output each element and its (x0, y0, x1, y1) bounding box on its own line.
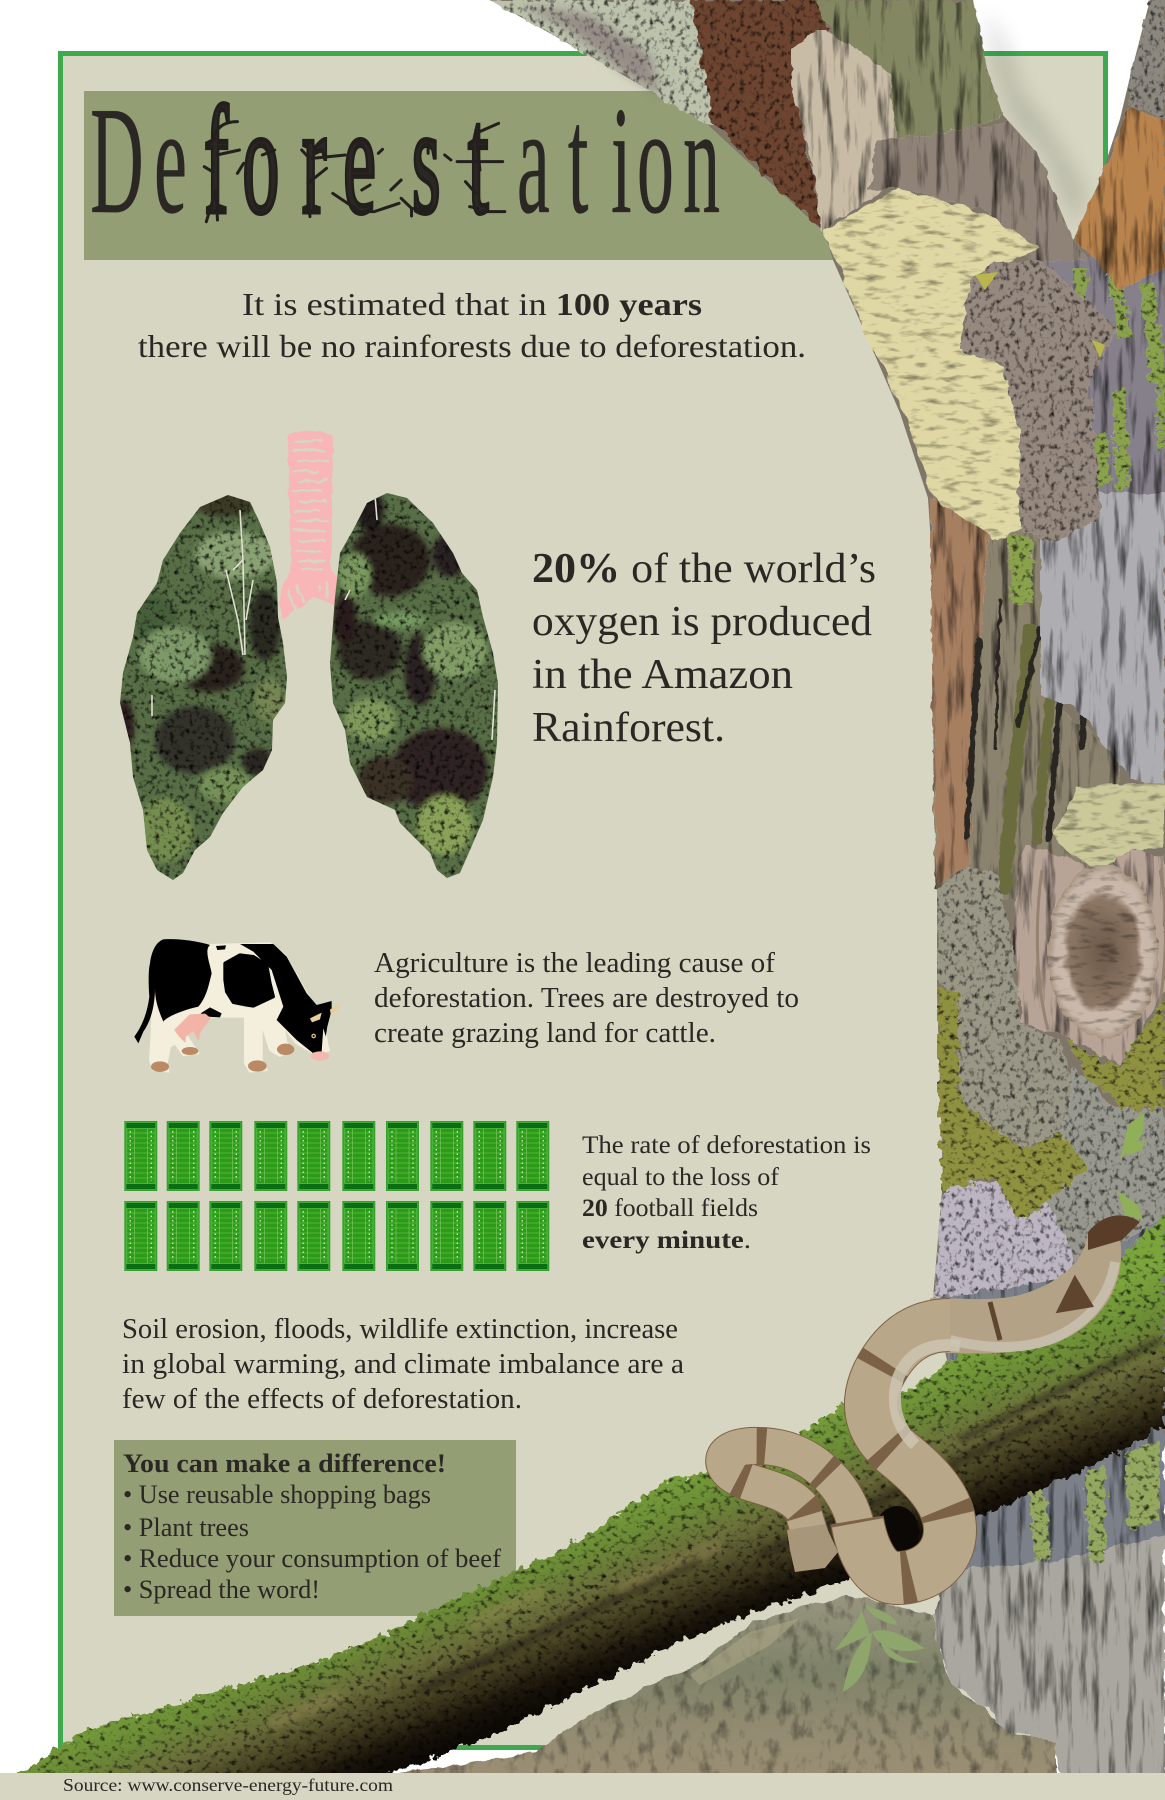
top lichen patch (490, 0, 718, 125)
snake main coil (857, 1325, 950, 1578)
dark cracks (967, 600, 1084, 840)
lungs fact text (532, 546, 876, 751)
football fields text (582, 1130, 871, 1254)
icon: grazing cow (134, 939, 340, 1072)
moss patches (937, 986, 1165, 1220)
callout: you can make a difference: • Plant trees (123, 1513, 249, 1542)
trachea (280, 431, 338, 620)
callout: you can make a difference: • Reduce your consumption of beef (123, 1544, 501, 1573)
title band (84, 91, 844, 260)
forest-filled lung shapes (110, 485, 505, 885)
cow text: deforestation. Trees are destroyed to (374, 983, 799, 1014)
snake tail loop (724, 1446, 857, 1535)
source strip background (0, 1773, 1165, 1800)
right limb gray bark (1128, 0, 1165, 120)
football fields text: 20 football fields (582, 1193, 758, 1222)
effects text: few of the effects of deforestation. (122, 1384, 522, 1415)
football fields text: The rate of deforestation is (582, 1130, 871, 1159)
gray lichen patch (1040, 1065, 1165, 1270)
football fields text: every minute . (582, 1225, 751, 1254)
orange bark (1075, 107, 1165, 291)
small yellow patch (1053, 782, 1165, 874)
callout: you can make a difference: You can make a difference! (123, 1449, 446, 1478)
gray-brown bark (867, 120, 1087, 262)
shadow behind tree (985, 10, 1085, 230)
effects text: Soil erosion, floods, wildlife extinction, increase (122, 1314, 678, 1345)
gray lichen bark (960, 260, 1117, 544)
source: Source: www.conserve-energy-future.com (63, 1775, 393, 1795)
lower trunk behind branch (933, 1200, 1165, 1785)
football fields text: equal to the loss of (582, 1162, 780, 1191)
ground mound behind branch (397, 1595, 1057, 1785)
lower moss (1028, 1440, 1160, 1565)
title: Deforestation (90, 76, 720, 246)
orange bark edge (930, 498, 990, 885)
cow text: create grazing land for cattle. (374, 1018, 716, 1049)
trunk base silhouette (490, 0, 1165, 1516)
intro text (138, 286, 806, 364)
moss strips (1007, 268, 1165, 605)
effects text: in global warming, and climate imbalance are a (122, 1349, 684, 1380)
pale blue-gray bark (1040, 480, 1165, 795)
lungs fact text: oxygen is produced (532, 599, 872, 645)
lungs illustration (110, 431, 505, 885)
callout: you can make a difference: • Spread the word! (123, 1575, 320, 1604)
lichen purple patch (933, 1180, 1080, 1298)
purple-gray bark with moss (1040, 255, 1165, 540)
olive grassy bark (815, 0, 1003, 140)
intro text: It is estimated that in 100 years (242, 286, 702, 322)
olive streaks (1004, 630, 1050, 888)
brown bark upper (932, 470, 1120, 900)
small green leaves (1117, 1112, 1145, 1220)
mossy branch (0, 1215, 1165, 1785)
branch bark streaks (270, 1340, 1160, 1725)
lungs fact text: in the Amazon (532, 652, 793, 698)
effects text (122, 1314, 684, 1415)
chart: 20 football fields (124, 1121, 549, 1271)
snake neck and head (930, 1232, 1121, 1354)
yellow wavy bark (823, 188, 1040, 540)
striped pale bark (791, 30, 897, 232)
lungs fact text: Rainforest. (532, 705, 725, 751)
gray-green lower bark (937, 866, 1073, 1148)
title twig ornaments (204, 122, 505, 222)
intro text: there will be no rainforests due to deforestation. (138, 328, 806, 364)
knot wood patch (1012, 845, 1165, 1065)
callout: you can make a difference: • Use reusable shopping bags (123, 1480, 431, 1509)
callout: you can make a difference (114, 1440, 516, 1616)
tree trunk collage (490, 0, 1165, 1785)
snake (724, 1215, 1140, 1578)
cow text (374, 948, 799, 1049)
cow text: Agriculture is the leading cause of (374, 948, 776, 979)
lower pale bark (933, 1535, 1165, 1785)
snake head (787, 1524, 838, 1572)
leaves under snake (835, 1605, 925, 1692)
lungs fact text: 20% of the world’s (532, 546, 876, 592)
brown bark top (690, 0, 830, 245)
